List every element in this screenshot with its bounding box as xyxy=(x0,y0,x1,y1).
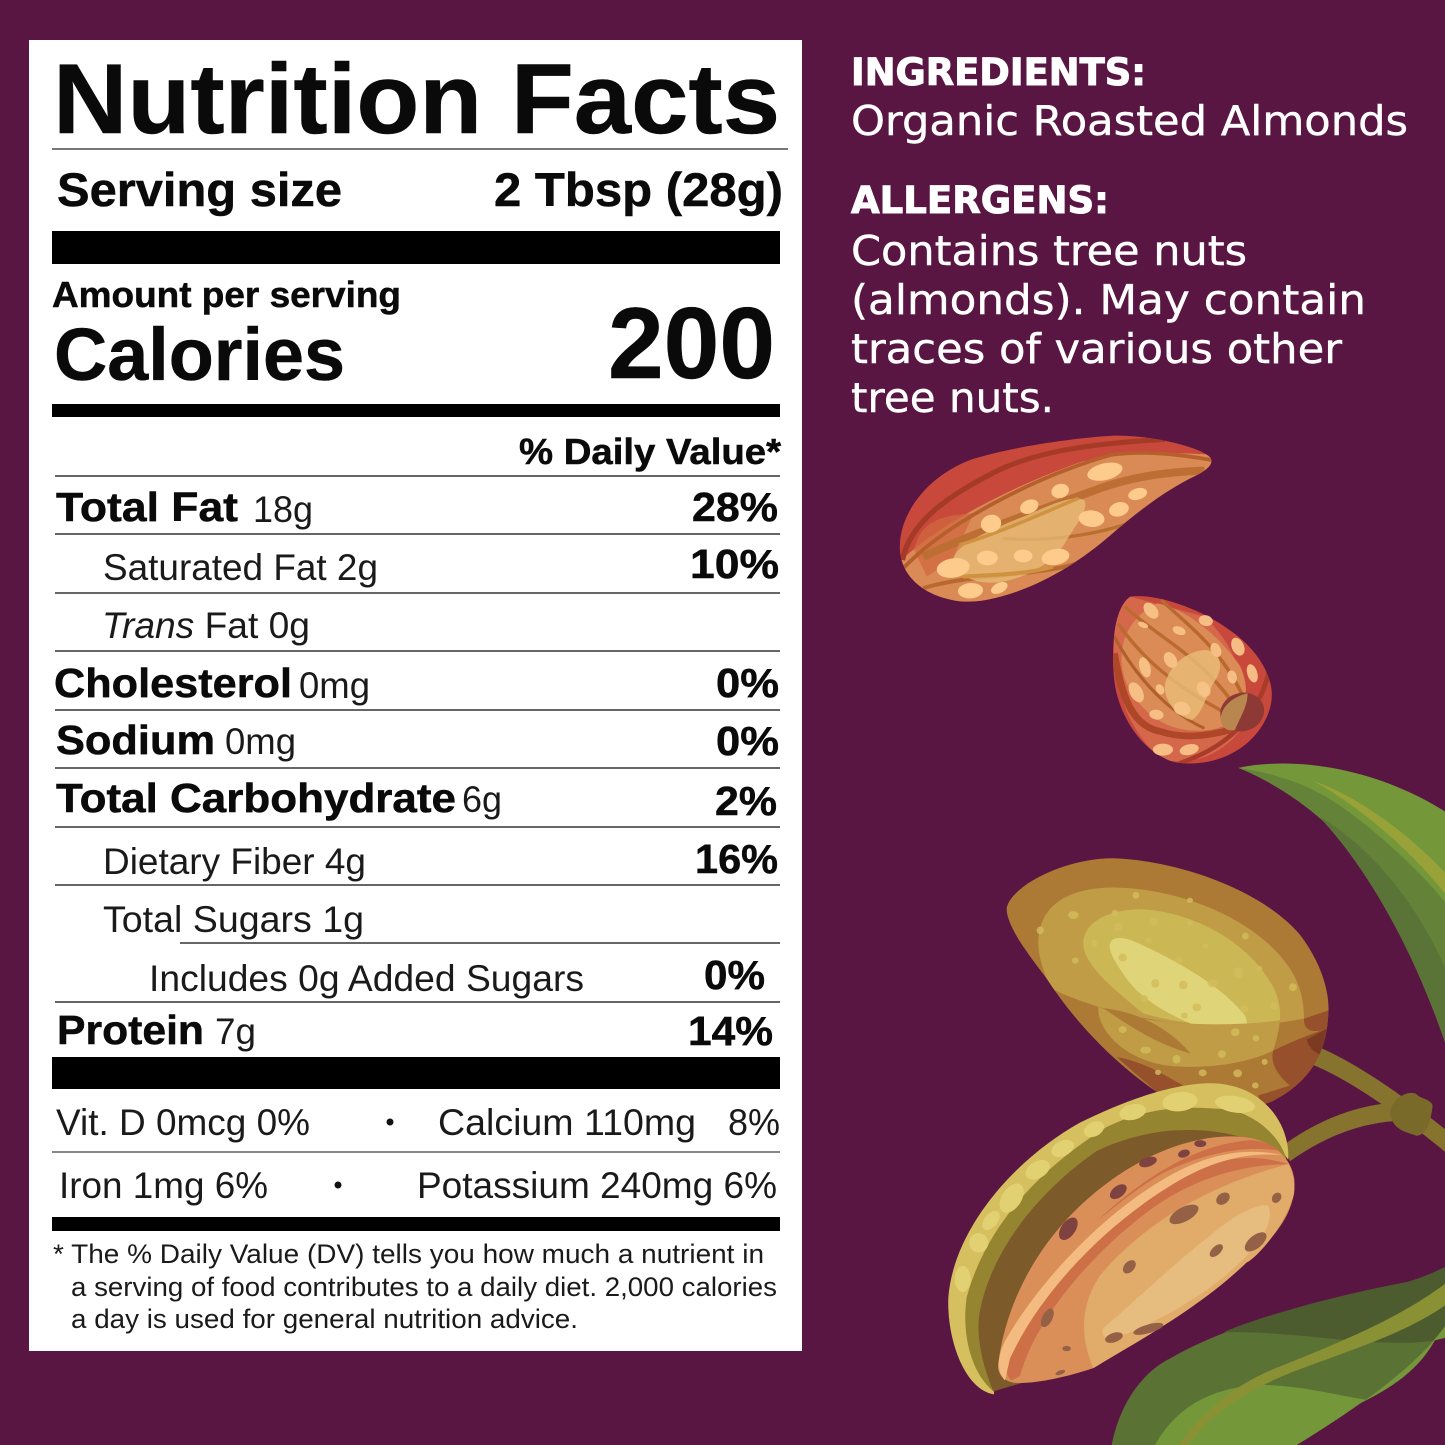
footnote: a serving of food contributes to a daily diet. 2,000 calories xyxy=(71,1272,777,1302)
ingredients text: INGREDIENTS: xyxy=(851,51,1146,94)
row: cholesterol: 0% xyxy=(716,660,779,706)
row: saturated fat xyxy=(103,541,779,588)
label background xyxy=(29,40,802,1351)
nut stripe xyxy=(1006,1158,1288,1380)
almond speckles xyxy=(1125,600,1260,757)
calories block: Amount per serving xyxy=(52,274,401,315)
lower lobe xyxy=(1098,1007,1280,1067)
icon: stems xyxy=(1287,1055,1445,1153)
icon: almond in open husk xyxy=(948,1083,1294,1394)
calories block xyxy=(52,274,775,400)
allergens text: traces of various other xyxy=(851,325,1342,373)
calories block: 200 xyxy=(608,288,775,400)
row: saturated fat: 10% xyxy=(690,541,779,587)
light husk layer xyxy=(1083,909,1280,1024)
row: dietary fiber: 16% xyxy=(695,836,778,882)
row: dietary fiber: Dietary Fiber 4g xyxy=(103,841,366,882)
row: total fat: 18g xyxy=(253,489,313,530)
husk inner brown xyxy=(979,1130,1287,1391)
footnote xyxy=(53,1239,777,1334)
mid husk layer xyxy=(1038,888,1304,1026)
row: protein: 14% xyxy=(688,1008,773,1054)
row: total carbohydrate: 2% xyxy=(715,778,777,824)
panel: nutrition facts label xyxy=(29,40,802,1351)
shaded right side xyxy=(1258,1010,1330,1105)
allergens text: Contains tree nuts xyxy=(851,227,1247,275)
row: iron and potassium xyxy=(59,1165,777,1206)
row: added sugars: Includes 0g Added Sugars xyxy=(149,958,584,999)
row: added sugars xyxy=(149,952,765,999)
row: cholesterol xyxy=(54,660,779,706)
row: cholesterol: Cholesterol xyxy=(54,660,292,706)
icon: almond kernel, elongated xyxy=(894,436,1215,610)
serving size row: Serving size xyxy=(57,163,342,216)
icon: almond kernel, teardrop xyxy=(1113,593,1272,764)
allergens text xyxy=(851,179,1366,422)
row: protein: 7g xyxy=(215,1011,256,1052)
husk inner olive xyxy=(965,1108,1287,1391)
title: Nutrition Facts xyxy=(53,43,780,154)
almond speckles xyxy=(935,459,1149,599)
row: total carbohydrate: Total Carbohydrate xyxy=(56,775,456,821)
husk speckles xyxy=(1037,892,1297,1089)
row: protein xyxy=(57,1007,773,1054)
row: sodium: 0mg xyxy=(225,721,296,762)
calories block: Calories xyxy=(54,313,345,396)
row: vitamin d and calcium: Vit. D 0mcg 0% xyxy=(56,1102,310,1143)
allergens text: ALLERGENS: xyxy=(851,179,1109,222)
row: vitamin d and calcium: 8% xyxy=(728,1102,780,1143)
row: protein: Protein xyxy=(57,1007,204,1053)
row: total carbohydrate: 6g xyxy=(462,779,502,820)
serving size row: 2 Tbsp (28g) xyxy=(494,163,783,216)
row: vitamin d and calcium xyxy=(56,1102,780,1143)
allergens text: (almonds). May contain xyxy=(851,276,1366,324)
row: trans fat: Trans Fat 0g xyxy=(102,605,310,646)
row: total fat: 28% xyxy=(692,484,778,530)
husk outer xyxy=(948,1083,1288,1394)
footnote: a day is used for general nutrition advice. xyxy=(71,1304,578,1334)
serving size row xyxy=(57,163,783,216)
icon: almond in green husk, closed xyxy=(1007,858,1330,1107)
ingredients text: Organic Roasted Almonds xyxy=(851,97,1408,145)
row: sodium: Sodium xyxy=(56,717,215,763)
row: added sugars: 0% xyxy=(704,952,765,998)
row: iron and potassium: Potassium 240mg 6% xyxy=(417,1165,777,1206)
husk highlight xyxy=(1110,938,1247,1024)
icon: bottom leaf xyxy=(1112,1265,1445,1445)
husk highlights xyxy=(955,1090,1256,1292)
row: sodium xyxy=(56,717,779,764)
row: iron and potassium: Iron 1mg 6% xyxy=(59,1165,268,1206)
daily value header: % Daily Value* xyxy=(519,431,781,472)
row: total fat xyxy=(56,484,778,530)
allergens text: tree nuts. xyxy=(851,374,1054,422)
nut pores xyxy=(1056,1140,1206,1244)
nut body xyxy=(998,1136,1294,1383)
icon: top leaf xyxy=(1238,764,1445,1057)
row: dietary fiber xyxy=(103,836,778,882)
row: total sugars: Total Sugars 1g xyxy=(103,899,364,940)
ingredients text xyxy=(851,51,1408,145)
row: saturated fat: Saturated Fat 2g xyxy=(103,547,378,588)
row: total fat: Total Fat xyxy=(56,484,238,530)
row: sodium: 0% xyxy=(716,718,779,764)
row: cholesterol: 0mg xyxy=(299,665,370,706)
row: total carbohydrate xyxy=(56,775,777,824)
row: vitamin d and calcium: Calcium 110mg xyxy=(438,1102,696,1143)
footnote: * The % Daily Value (DV) tells you how much a nutrient in xyxy=(53,1239,764,1269)
